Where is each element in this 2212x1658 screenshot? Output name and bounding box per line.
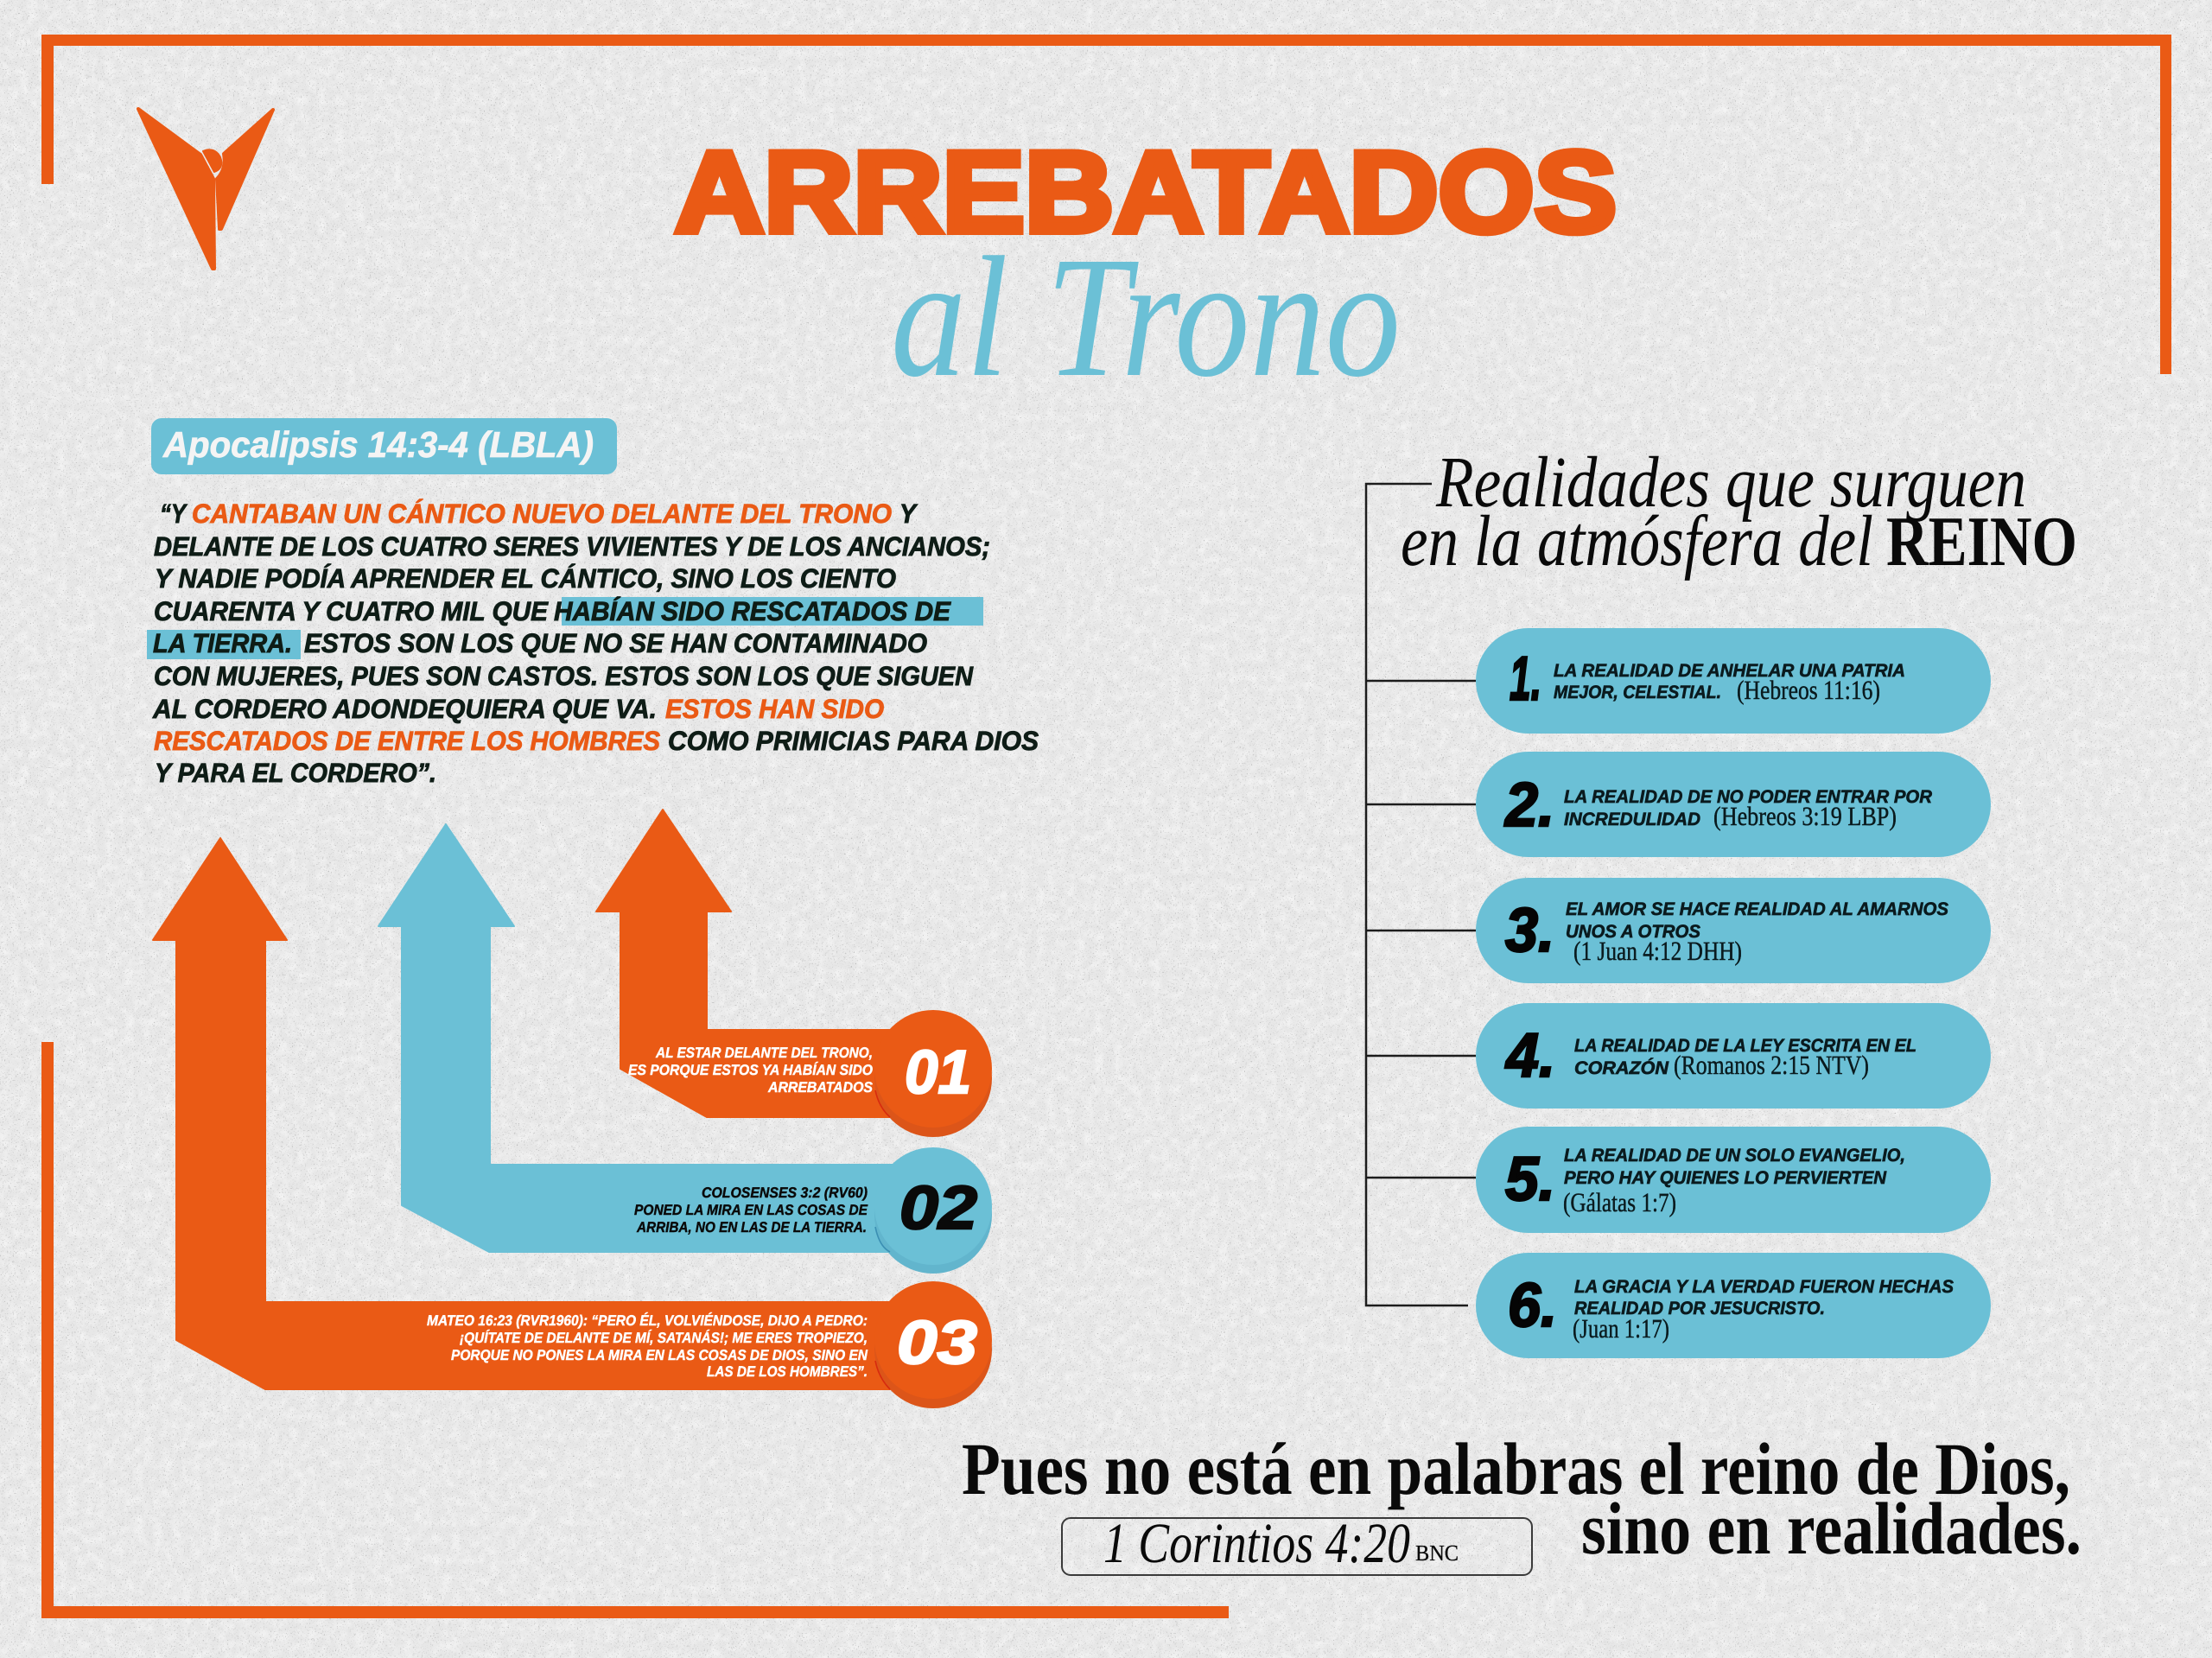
verse text [152,499,1039,788]
reference pill: Apocalipsis 14:3-4 (LBLA) [162,424,594,465]
reality 1: 1. [1510,645,1541,714]
verse text: Y NADIE PODÍA APRENDER EL CÁNTICO, SINO LOS CIENTO [155,563,896,594]
verse text: COMO PRIMICIAS PARA DIOS [668,726,1039,756]
verse text: Y PARA EL CORDERO”. [155,758,436,788]
title: al Trono: al Trono [891,222,1401,413]
verse text: ESTOS HAN SIDO [665,694,884,724]
frame: top right bracket [41,35,2171,374]
text 03: PORQUE NO PONES LA MIRA EN LAS COSAS DE DIOS, SINO EN [451,1347,868,1363]
heading: realidades: en la atmósfera del [1401,501,1873,581]
text 01: AL ESTAR DELANTE DEL TRONO, [655,1045,873,1061]
citation box: 1 Corintios 4:20: BNC [1415,1540,1459,1566]
reality 3: (1 Juan 4:12 DHH) [1573,936,1742,966]
verse text: CANTABAN UN CÁNTICO NUEVO DELANTE DEL TRONO [192,499,892,529]
text 01: ES PORQUE ESTOS YA HABÍAN SIDO [628,1061,873,1078]
arrow 3: orange, Mateo 16:23 [153,838,992,1408]
heading: realidades: Realidades que surguen [1435,442,2026,523]
reality 2 [1476,752,1991,857]
closing quote: sino en realidades. [1581,1487,2082,1570]
reality 5: LA REALIDAD DE UN SOLO EVANGELIO, [1564,1146,1905,1166]
reference pill [151,418,617,474]
reality 4: 4. [1504,1021,1555,1090]
reality 5: 5. [1505,1145,1555,1214]
connector lines [1366,484,1476,1305]
text 03: ¡QUÍTATE DE DELANTE DE MÍ, SATANÁS!; ME ERES TROPIEZO, [460,1329,868,1346]
arrow 2: blue, Colosenses 3:2 [378,824,992,1274]
verse text: AL CORDERO ADONDEQUIERA QUE VA. [152,694,657,724]
panel: realidades tree [1366,442,2077,1358]
number 01: 01 [905,1039,971,1107]
verse text: CON MUJERES, PUES SON CASTOS. ESTOS SON LOS QUE SIGUEN [154,661,974,691]
reality 2: LA REALIDAD DE NO PODER ENTRAR POR [1564,787,1933,807]
text 02: COLOSENSES 3:2 (RV60) [702,1185,868,1201]
reality 6 [1476,1253,1991,1358]
arrow 1: orange, delante del trono [596,810,992,1137]
panel: scripture passage [147,418,1039,788]
title [675,129,1617,413]
frame: bottom left bracket [41,1042,1229,1618]
reality 1: MEJOR, CELESTIAL. [1554,683,1721,702]
reality 4: CORAZÓN [1574,1058,1669,1078]
verse text: ESTOS SON LOS QUE NO SE HAN CONTAMINADO [304,628,927,658]
text 02 [634,1185,868,1236]
reality 2: INCREDULIDAD [1564,810,1700,829]
text 01: ARREBATADOS [767,1079,874,1096]
reality 3: 3. [1505,896,1554,965]
number 02: 02 [899,1174,977,1242]
verse text: CUARENTA Y CUATRO MIL QUE [154,596,549,626]
reality 3: EL AMOR SE HACE REALIDAD AL AMARNOS [1566,899,1948,919]
reality 1 [1476,628,1991,734]
reality 5: (Gálatas 1:7) [1563,1187,1676,1217]
citation box: 1 Corintios 4:20: 1 Corintios 4:20 [1103,1512,1410,1575]
number 03: 03 [897,1309,977,1377]
text 02: ARRIBA, NO EN LAS DE LA TIERRA. [636,1219,867,1236]
verse text: Y [899,499,918,529]
reality 6: (Juan 1:17) [1573,1313,1669,1344]
reality 2: 2. [1503,771,1554,840]
reality 1: (Hebreos 11:16) [1737,675,1880,705]
reality 4 [1476,1003,1991,1109]
verse text: RESCATADOS DE ENTRE LOS HOMBRES [154,726,660,756]
verse highlights [147,597,983,659]
heading: realidades: REINO [1886,502,2077,581]
reality 6: 6. [1508,1271,1557,1340]
reality 6: REALIDAD POR JESUCRISTO. [1574,1299,1825,1318]
verse text: LA TIERRA. [153,628,292,658]
text 03 [427,1312,868,1380]
closing quote [962,1427,2082,1570]
reality 3: UNOS A OTROS [1566,922,1700,942]
heading: realidades [1401,442,2077,581]
reality 1: LA REALIDAD DE ANHELAR UNA PATRIA [1554,661,1905,681]
reality 5 [1476,1127,1991,1233]
icon: logo winged figure [138,109,273,269]
reality 6: LA GRACIA Y LA VERDAD FUERON HECHAS [1574,1277,1954,1297]
verse text: DELANTE DE LOS CUATRO SERES VIVIENTES Y DE LOS ANCIANOS; [154,531,990,562]
reality 4: LA REALIDAD DE LA LEY ESCRITA EN EL [1574,1036,1916,1056]
verse text: HABÍAN SIDO RESCATADOS DE [554,596,951,626]
text 03: MATEO 16:23 (RVR1960): “PERO ÉL, VOLVIÉNDOSE, DIJO A PEDRO: [427,1312,868,1329]
reality 2: (Hebreos 3:19 LBP) [1713,801,1897,831]
text 03: LAS DE LOS HOMBRES”. [707,1363,868,1380]
reality 3 [1476,878,1991,983]
text 02: PONED LA MIRA EN LAS COSAS DE [634,1202,868,1218]
verse text: “Y [160,499,188,529]
title: ARREBATADOS: ARREBATADOS [675,129,1617,257]
reality 5: PERO HAY QUIENES LO PERVIERTEN [1564,1168,1887,1188]
text 01 [628,1045,874,1096]
reality 4: (Romanos 2:15 NTV) [1674,1050,1869,1080]
